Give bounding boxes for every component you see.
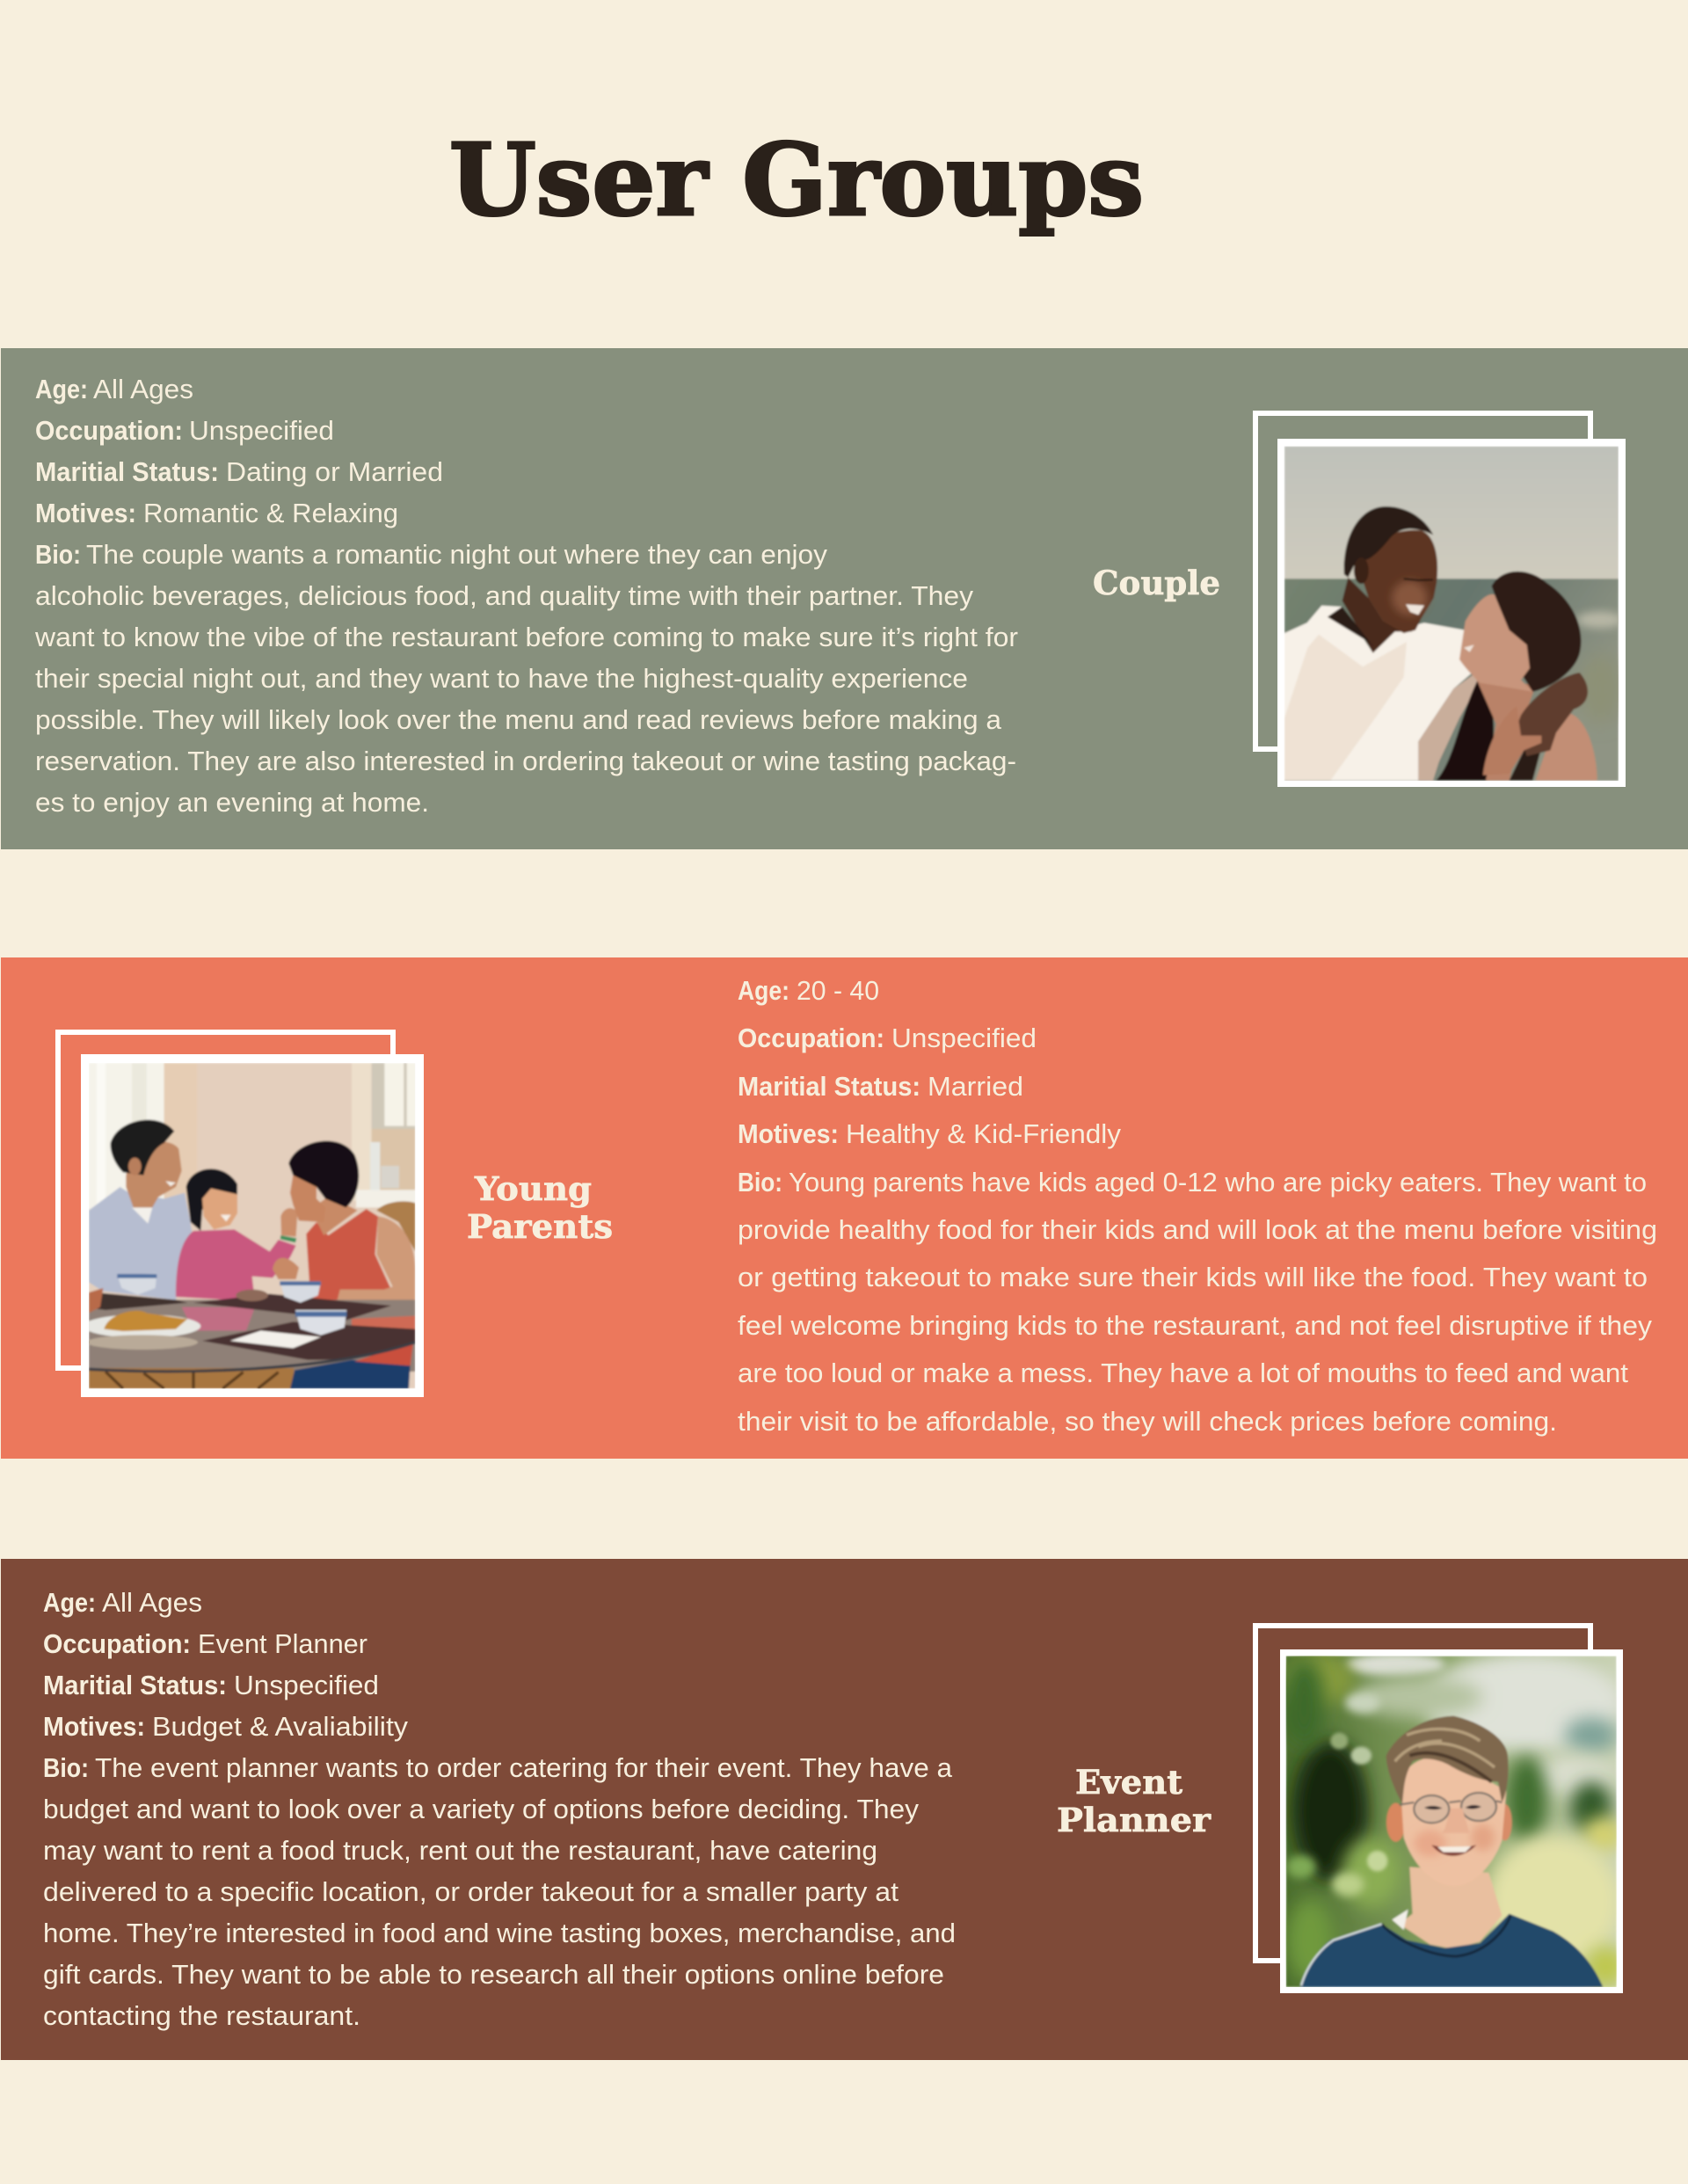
- event planner attributes and bio text: Budget & Avaliability: [152, 1711, 409, 1742]
- event planner attributes and bio text: Age:: [43, 1587, 96, 1618]
- couple attributes and bio text: Occupation:: [35, 415, 183, 446]
- event planner attributes and bio text: [43, 1587, 956, 2031]
- heading: Event Planner: [1057, 1763, 1211, 1839]
- event planner attributes and bio text: The event planner wants to order catering for their event. They have a: [95, 1752, 953, 1783]
- young parents attributes and bio text: [738, 975, 1657, 1437]
- couple attributes and bio text: possible. They will likely look over the menu and read reviews before making a: [35, 704, 1002, 735]
- young parents attributes and bio text: feel welcome bringing kids to the restaurant, and not feel disruptive if they: [738, 1310, 1653, 1341]
- young parents attributes and bio text: are too loud or make a mess. They have a lot of mouths to feed and want: [738, 1358, 1628, 1388]
- couple attributes and bio text: Bio:: [35, 539, 81, 570]
- couple attributes and bio text: Motives:: [35, 498, 136, 528]
- young parents attributes and bio text: 20 - 40: [797, 975, 879, 1006]
- event planner attributes and bio text: Motives:: [43, 1711, 145, 1742]
- couple attributes and bio text: [34, 374, 1018, 818]
- young parents attributes and bio text: provide healthy food for their kids and will look at the menu before visiting: [738, 1214, 1657, 1245]
- photo: young parents: [84, 1063, 415, 1388]
- event planner attributes and bio text: Maritial Status:: [43, 1670, 227, 1700]
- young parents attributes and bio text: or getting takeout to make sure their kids will like the food. They want to: [738, 1262, 1648, 1292]
- young parents attributes and bio text: Maritial Status:: [738, 1071, 920, 1102]
- couple attributes and bio text: want to know the vibe of the restaurant before coming to make sure it’s right for: [34, 622, 1018, 652]
- panel: couple: [1, 348, 1688, 849]
- couple attributes and bio text: Unspecified: [189, 415, 334, 446]
- event planner attributes and bio text: may want to rent a food truck, rent out the restaurant, have catering: [43, 1835, 877, 1866]
- event planner attributes and bio text: Unspecified: [234, 1670, 379, 1700]
- panel: event planner: [1, 1559, 1688, 2060]
- couple attributes and bio text: reservation. They are also interested in ordering takeout or wine tasting packag-: [35, 746, 1016, 776]
- event planner attributes and bio text: budget and want to look over a variety of options before deciding. They: [43, 1794, 920, 1824]
- photo: event planner: [1284, 1653, 1626, 1987]
- young parents attributes and bio text: Occupation:: [738, 1023, 884, 1053]
- couple attributes and bio text: Age:: [35, 374, 88, 404]
- event planner attributes and bio text: delivered to a specific location, or order takeout for a smaller party at: [43, 1876, 899, 1907]
- couple attributes and bio text: Dating or Married: [226, 456, 443, 487]
- back frame: event planner: [1255, 1626, 1590, 1961]
- young parents attributes and bio text: Unspecified: [891, 1023, 1037, 1053]
- heading: Couple: Couple: [1093, 564, 1220, 602]
- young parents attributes and bio text: Young parents have kids aged 0-12 who are picky eaters. They want to: [789, 1167, 1647, 1198]
- panel: young parents: [1, 957, 1688, 1459]
- photo frame: event planner: [1280, 1649, 1623, 1993]
- back frame: couple: [1255, 413, 1590, 749]
- title: User Groups: [449, 123, 1144, 238]
- couple attributes and bio text: All Ages: [93, 374, 193, 404]
- event planner attributes and bio text: All Ages: [102, 1587, 202, 1618]
- photo frame: young parents: [81, 1054, 424, 1397]
- couple attributes and bio text: alcoholic beverages, delicious food, and quality time with their partner. They: [35, 580, 974, 611]
- event planner attributes and bio text: home. They’re interested in food and wine tasting boxes, merchandise, and: [43, 1918, 956, 1948]
- heading: Event Planner: Event: [1075, 1763, 1182, 1802]
- heading: Young Parents: Parents: [467, 1207, 613, 1246]
- photo frame: couple: [1277, 439, 1626, 787]
- couple attributes and bio text: their special night out, and they want to have the highest-quality experience: [35, 663, 968, 694]
- young parents attributes and bio text: Healthy & Kid-Friendly: [846, 1118, 1121, 1149]
- young parents attributes and bio text: Age:: [738, 975, 789, 1006]
- event planner attributes and bio text: gift cards. They want to be able to research all their options online before: [43, 1959, 944, 1990]
- heading: Young Parents: Young: [474, 1169, 592, 1208]
- photo: couple: [1284, 447, 1624, 781]
- event planner attributes and bio text: contacting the restaurant.: [43, 2000, 360, 2031]
- heading: Event Planner: Planner: [1057, 1801, 1211, 1839]
- young parents attributes and bio text: Married: [928, 1071, 1023, 1102]
- couple attributes and bio text: The couple wants a romantic night out where they can enjoy: [86, 539, 828, 570]
- young parents attributes and bio text: Bio:: [738, 1167, 782, 1198]
- heading: Young Parents: [467, 1169, 613, 1246]
- young parents attributes and bio text: Motives:: [738, 1118, 839, 1149]
- couple attributes and bio text: es to enjoy an evening at home.: [35, 787, 429, 818]
- event planner attributes and bio text: Bio:: [43, 1752, 89, 1783]
- couple attributes and bio text: Maritial Status:: [35, 456, 219, 487]
- young parents attributes and bio text: their visit to be affordable, so they will check prices before coming.: [738, 1406, 1557, 1437]
- event planner attributes and bio text: Event Planner: [198, 1628, 367, 1659]
- event planner attributes and bio text: Occupation:: [43, 1628, 191, 1659]
- couple attributes and bio text: Romantic & Relaxing: [143, 498, 398, 528]
- back frame: young parents: [58, 1032, 393, 1368]
